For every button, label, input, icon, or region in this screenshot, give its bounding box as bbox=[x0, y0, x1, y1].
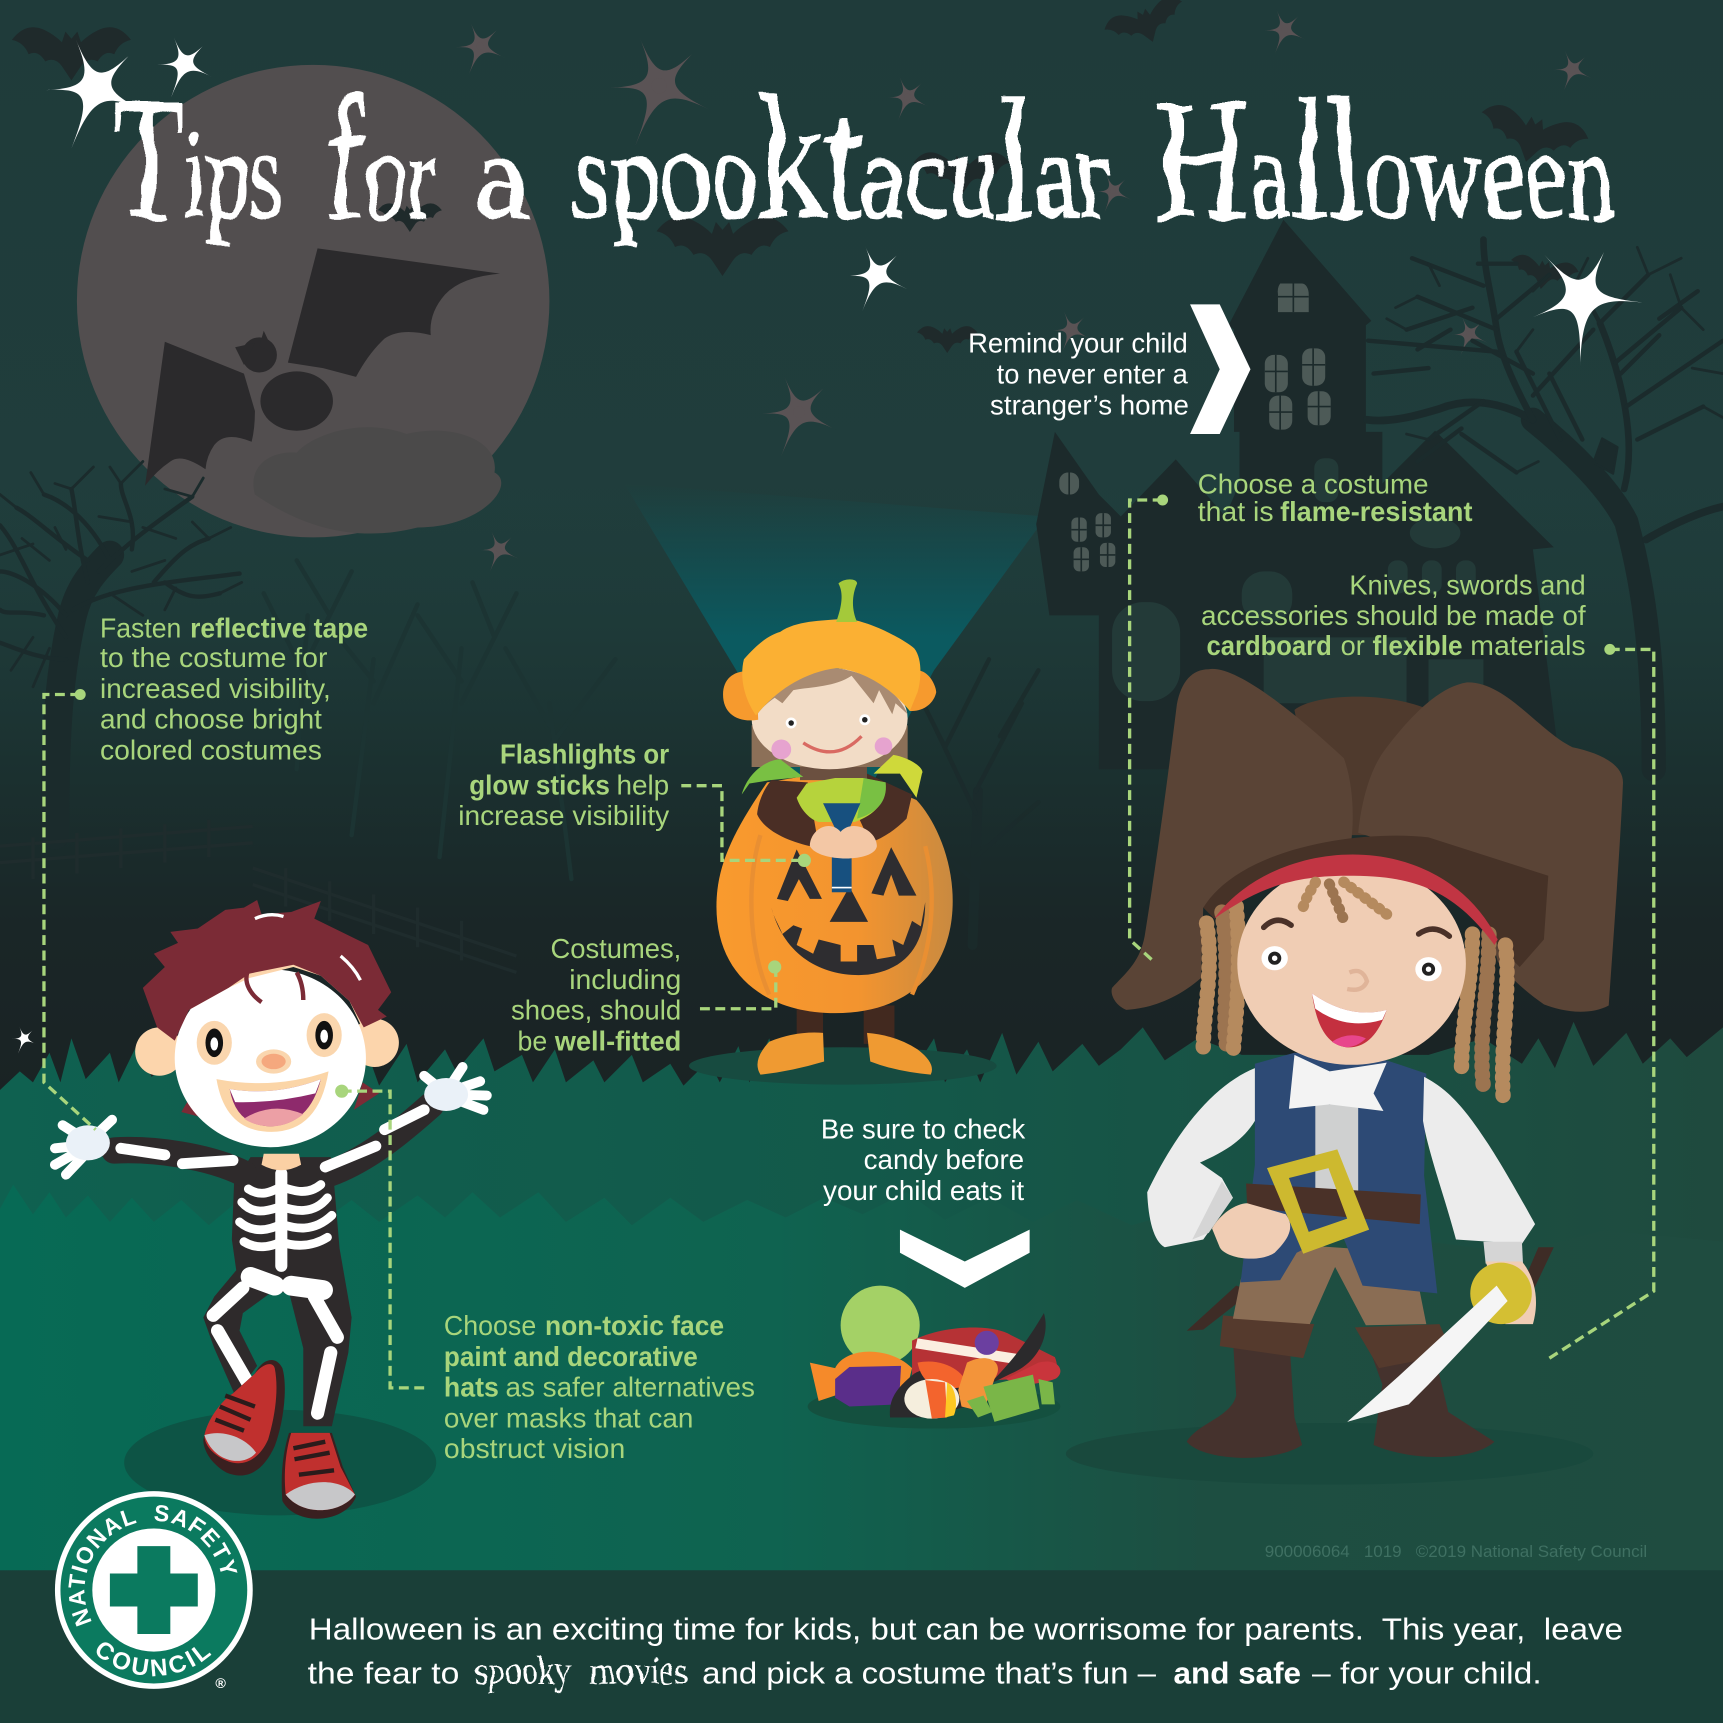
title: for bbox=[325, 63, 435, 256]
tip: knives and swords: or bbox=[1341, 630, 1365, 661]
tip: stranger's home: to never enter a bbox=[997, 358, 1189, 389]
tip: reflective tape: and choose bright bbox=[100, 704, 322, 735]
tip: well-fitted: be bbox=[518, 1026, 547, 1057]
tip: stranger's home: Remind your child bbox=[968, 328, 1188, 359]
footer band bbox=[0, 1570, 1723, 1723]
title: Tips bbox=[114, 63, 281, 256]
connector: face paint bbox=[335, 1085, 426, 1388]
faint background trees bbox=[264, 560, 615, 879]
pumpkin child bbox=[689, 579, 997, 1085]
tip: stranger's home bbox=[968, 328, 1189, 420]
tip: flashlights: increase visibility bbox=[458, 800, 669, 831]
connector: reflective tape bbox=[44, 689, 96, 1130]
intro text: spooky bbox=[475, 1648, 572, 1692]
tip: face paint: paint and decorative bbox=[444, 1341, 698, 1372]
tip: well-fitted bbox=[511, 933, 681, 1057]
pirate child bbox=[1066, 669, 1623, 1485]
tip: check candy bbox=[821, 1113, 1025, 1206]
tip: reflective tape bbox=[100, 612, 368, 765]
flashlight beam bbox=[624, 483, 1046, 791]
tip: well-fitted: shoes, should bbox=[511, 995, 681, 1026]
tip: knives and swords: flexible bbox=[1372, 630, 1463, 661]
tip: flashlights: glow sticks bbox=[469, 769, 610, 800]
haunted house bbox=[1036, 220, 1560, 769]
intro text: the fear to bbox=[308, 1655, 459, 1690]
tip: face paint: obstruct vision bbox=[444, 1433, 625, 1464]
white sparkle stars bbox=[12, 37, 1656, 1054]
lower grass layer bbox=[0, 1185, 1723, 1723]
intro text: and pick a costume that’s fun – bbox=[702, 1655, 1157, 1690]
tip: face paint: over masks that can bbox=[444, 1402, 693, 1433]
candy pile bbox=[808, 1286, 1060, 1429]
small flying bats bbox=[12, 0, 1591, 353]
tip: check candy: your child eats it bbox=[823, 1175, 1024, 1206]
tip: reflective tape: colored costumes bbox=[100, 734, 322, 765]
fence bbox=[0, 820, 516, 972]
tip: check candy: candy before bbox=[864, 1144, 1024, 1175]
large bat on moon bbox=[145, 248, 500, 486]
tip: flame-resistant: that is bbox=[1198, 496, 1274, 527]
skeleton child bbox=[55, 900, 487, 1519]
tip: face paint: hats bbox=[444, 1372, 499, 1403]
connector: flame-resistant bbox=[1130, 494, 1168, 961]
title: Halloween bbox=[1154, 63, 1615, 256]
left bare tree bbox=[0, 462, 242, 835]
tip: flashlights: Flashlights or bbox=[500, 739, 669, 770]
intro text: movies bbox=[590, 1648, 688, 1692]
tree behind pumpkin child bbox=[912, 659, 1038, 945]
tip: reflective tape: to the costume for bbox=[100, 642, 327, 673]
tip: flame-resistant bbox=[1198, 468, 1472, 527]
logo: National Safety Council: COUNCIL bbox=[96, 1642, 212, 1676]
intro text: – for your child. bbox=[1312, 1655, 1542, 1690]
arrow: chevron right bbox=[1190, 304, 1250, 434]
upper grass layer bbox=[0, 1022, 1723, 1723]
intro text bbox=[308, 1611, 1623, 1692]
connector: well-fitted bbox=[700, 960, 781, 1009]
tip: well-fitted: including bbox=[569, 964, 681, 995]
logo: National Safety Council: NATIONAL SAFETY bbox=[68, 1505, 238, 1626]
tip: reflective tape: increased visibility, bbox=[100, 673, 331, 704]
intro text: Halloween is an exciting time for kids, but can be worrisome for parents. This year, leave bbox=[309, 1611, 1623, 1646]
connector: knives bbox=[1549, 644, 1654, 1358]
tip: reflective tape: reflective tape bbox=[190, 612, 368, 643]
tip: knives and swords: accessories should be made of bbox=[1201, 600, 1586, 631]
tip: face paint: Choose bbox=[444, 1310, 536, 1341]
connector: flashlights bbox=[681, 786, 811, 867]
right bare tree bbox=[1367, 240, 1723, 769]
tip: well-fitted: well-fitted bbox=[554, 1026, 681, 1057]
tip: flame-resistant: flame-resistant bbox=[1280, 496, 1472, 527]
tip: flashlights bbox=[458, 739, 669, 831]
logo: National Safety Council bbox=[54, 1491, 253, 1692]
title bbox=[114, 63, 1615, 256]
gray background stars bbox=[455, 10, 1592, 573]
tip: flashlights: help bbox=[616, 769, 669, 800]
tip: well-fitted: Costumes, bbox=[551, 933, 681, 964]
tip: knives and swords: materials bbox=[1470, 630, 1586, 661]
tip: knives and swords bbox=[1201, 569, 1586, 661]
intro text: and safe bbox=[1174, 1655, 1301, 1690]
dark hillside bbox=[0, 483, 1723, 1099]
tip: face paint: non-toxic face bbox=[545, 1310, 724, 1341]
tip: face paint: as safer alternatives bbox=[505, 1372, 755, 1403]
arrow: chevron down bbox=[900, 1230, 1030, 1288]
moon bbox=[77, 65, 549, 537]
tip: knives and swords: Knives, swords and bbox=[1349, 569, 1586, 600]
tip: reflective tape: Fasten bbox=[100, 612, 181, 643]
logo: National Safety Council: ® bbox=[215, 1676, 226, 1692]
title: a bbox=[475, 104, 530, 246]
title: spooktacular bbox=[574, 63, 1110, 256]
tip: knives and swords: cardboard bbox=[1207, 630, 1332, 661]
tip: face paint bbox=[444, 1310, 755, 1464]
copyright line: 900006064 1019 ©2019 National Safety Council bbox=[1265, 1542, 1647, 1561]
tip: stranger's home: stranger’s home bbox=[990, 389, 1189, 420]
tip: check candy: Be sure to check bbox=[821, 1113, 1025, 1144]
tip: flame-resistant: Choose a costume bbox=[1198, 468, 1429, 499]
